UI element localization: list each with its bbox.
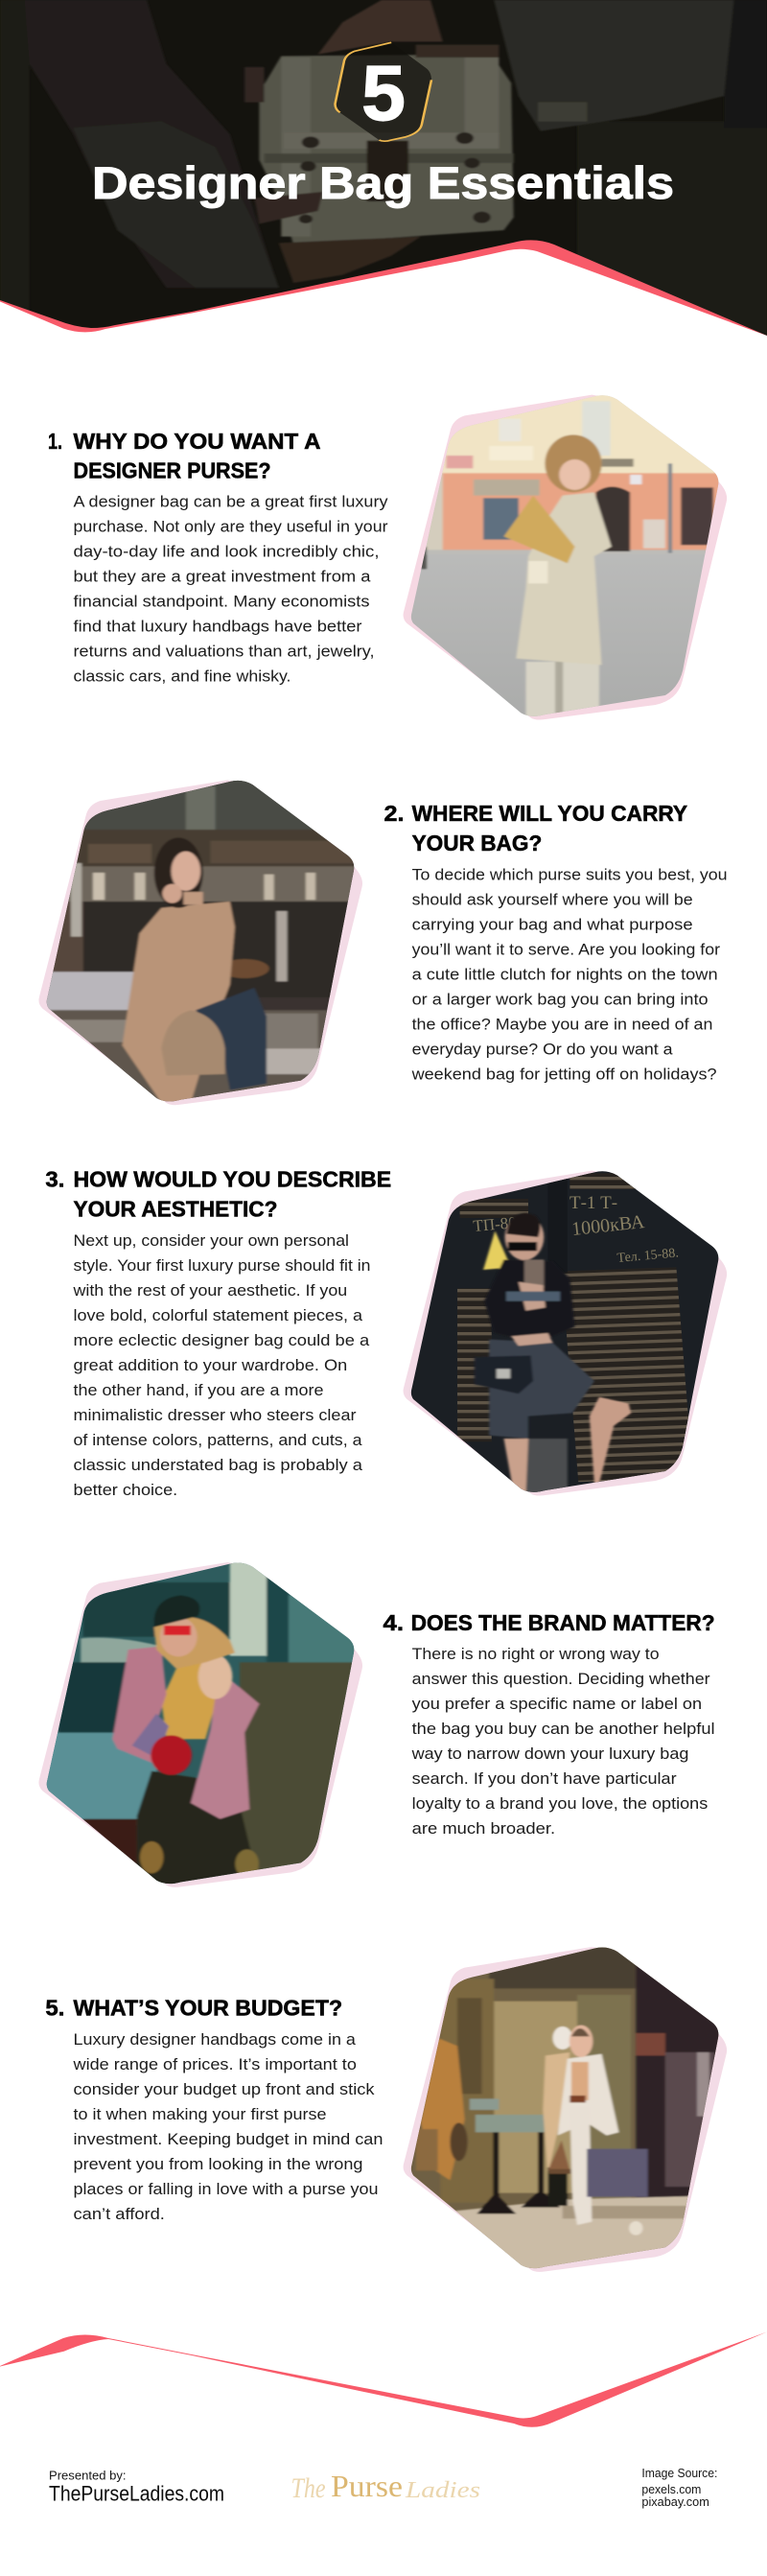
body text 4: are much broader. bbox=[412, 1819, 555, 1838]
heading 1: 1. bbox=[48, 429, 62, 454]
heading 2 bbox=[384, 801, 687, 855]
number 5: 5 bbox=[361, 50, 406, 137]
body text 3: the other hand, if you are a more bbox=[73, 1381, 324, 1399]
heading 5: WHAT’S YOUR BUDGET? bbox=[73, 1995, 342, 2020]
panel: section 5 bbox=[45, 1940, 733, 2280]
body text 2: everyday purse? Or do you want a bbox=[412, 1040, 673, 1059]
body text 1: but they are a great investment from a bbox=[73, 568, 371, 585]
logo: The Purse Ladies bbox=[291, 2469, 480, 2504]
title: Designer Bag Essentials bbox=[92, 157, 674, 208]
logo: The Purse Ladies: The bbox=[291, 2472, 326, 2504]
stencilled wall lettering: 1000кВА bbox=[570, 1211, 646, 1240]
panel: section 2 bbox=[38, 774, 728, 1110]
body text 3: minimalistic dresser who steers clear bbox=[73, 1406, 357, 1424]
heading 1 bbox=[48, 429, 320, 483]
panel: section 4 bbox=[38, 1557, 715, 1892]
coral wave below header bbox=[0, 240, 767, 357]
body text 1 bbox=[73, 493, 388, 685]
body text 2: or a larger work bag you can bring into bbox=[412, 990, 709, 1009]
photo 2: woman in beige coat on a bench bbox=[38, 774, 372, 1110]
body text 4: you prefer a specific name or label on bbox=[412, 1695, 702, 1713]
heading 3: YOUR AESTHETIC? bbox=[73, 1197, 278, 1222]
header photo: hands holding a handbag bbox=[0, 0, 767, 355]
body text 4: loyalty to a brand you love, the options bbox=[412, 1794, 708, 1813]
body text 1: find that luxury handbags have better bbox=[73, 618, 362, 635]
image source: pixabay.com bbox=[641, 2494, 709, 2509]
stencilled wall lettering: Тел. 15-88. bbox=[616, 1246, 679, 1266]
image source bbox=[641, 2466, 717, 2509]
body text 3: classic understated bag is probably a bbox=[73, 1456, 363, 1474]
heading 3: 3. bbox=[45, 1166, 64, 1191]
body text 4: There is no right or wrong way to bbox=[412, 1645, 660, 1663]
body text 2: you’ll want it to serve. Are you looking for bbox=[412, 940, 720, 959]
heading 2: YOUR BAG? bbox=[412, 831, 542, 855]
body text 1: day-to-day life and look incredibly chic, bbox=[73, 543, 380, 560]
body text 5: Luxury designer handbags come in a bbox=[73, 2030, 356, 2049]
photo 4: woman in pink fur with red belt bag bbox=[38, 1557, 372, 1892]
body text 2 bbox=[411, 865, 728, 1084]
body text 5 bbox=[72, 2030, 384, 2223]
body text 5: consider your budget up front and stick bbox=[73, 2080, 375, 2098]
photo 1: woman in trench coat with gold clutch bbox=[401, 390, 733, 726]
body text 3: better choice. bbox=[73, 1481, 177, 1499]
panel: section 1 bbox=[48, 390, 733, 726]
body text 1: financial standpoint. Many economists bbox=[73, 593, 370, 610]
body text 3: Next up, consider your own personal bbox=[73, 1231, 349, 1250]
body text 4: search. If you don’t have particular bbox=[412, 1769, 677, 1788]
heading 1: DESIGNER PURSE? bbox=[73, 458, 270, 483]
body text 3: more eclectic designer bag could be a bbox=[73, 1331, 370, 1349]
body text 2: To decide which purse suits you best, you bbox=[412, 865, 728, 884]
body text 1: A designer bag can be a great first luxury bbox=[73, 493, 388, 510]
heading 5: 5. bbox=[45, 1995, 64, 2020]
body text 5: can’t afford. bbox=[73, 2205, 165, 2223]
body text 4: answer this question. Deciding whether bbox=[412, 1670, 710, 1688]
presented by: Presented by: bbox=[49, 2469, 127, 2482]
body text 3: style. Your first luxury purse should fit in bbox=[73, 1256, 370, 1275]
body text 1: classic cars, and fine whisky. bbox=[73, 667, 291, 685]
photo 3: woman against dark louvered wall bbox=[401, 1163, 733, 1503]
body text 5: investment. Keeping budget in mind can bbox=[73, 2130, 384, 2148]
logo: The Purse Ladies: Ladies bbox=[405, 2478, 480, 2503]
body text 5: places or falling in love with a purse you bbox=[73, 2180, 378, 2198]
stencilled wall lettering: ТП-80 bbox=[473, 1213, 517, 1235]
body text 5: to it when making your first purse bbox=[73, 2105, 326, 2123]
body text 3 bbox=[72, 1231, 371, 1499]
photo 5: woman shopping beside boutique window bbox=[401, 1940, 733, 2280]
panel: section 3 bbox=[45, 1163, 733, 1503]
heading 3 bbox=[45, 1166, 391, 1222]
heading 4: DOES THE BRAND MATTER? bbox=[411, 1610, 715, 1635]
body text 1: purchase. Not only are they useful in your bbox=[73, 518, 388, 535]
body text 3: of intense colors, patterns, and cuts, a bbox=[73, 1431, 362, 1449]
body text 3: love bold, colorful statement pieces, a bbox=[73, 1306, 363, 1324]
body text 2: weekend bag for jetting off on holidays? bbox=[411, 1065, 717, 1084]
logo: The Purse Ladies: Purse bbox=[331, 2469, 403, 2503]
heading 2: 2. bbox=[384, 801, 405, 826]
stencilled wall lettering bbox=[473, 1197, 679, 1262]
heading 3: HOW WOULD YOU DESCRIBE bbox=[73, 1166, 391, 1191]
body text 5: wide range of prices. It’s important to bbox=[72, 2055, 357, 2073]
body text 4: the bag you buy can be another helpful bbox=[412, 1720, 715, 1738]
body text 2: should ask yourself where you will be bbox=[412, 890, 693, 909]
presented by bbox=[49, 2469, 224, 2505]
body text 4 bbox=[411, 1645, 715, 1838]
heading 4: 4. bbox=[384, 1610, 404, 1635]
coral wave divider bbox=[0, 2332, 767, 2427]
heading 1: WHY DO YOU WANT A bbox=[73, 429, 320, 454]
body text 2: the office? Maybe you are in need of an bbox=[412, 1015, 712, 1034]
body text 1: returns and valuations than art, jewelry, bbox=[73, 643, 374, 660]
image source: pexels.com bbox=[641, 2482, 701, 2496]
body text 4: way to narrow down your luxury bag bbox=[411, 1745, 688, 1763]
body text 3: great addition to your wardrobe. On bbox=[73, 1356, 347, 1374]
heading 2: WHERE WILL YOU CARRY bbox=[412, 801, 687, 826]
badge: gold outlined hexagon bbox=[335, 42, 431, 141]
header panel bbox=[0, 0, 767, 355]
body text 5: prevent you from looking in the wrong bbox=[73, 2155, 362, 2173]
body text 3: with the rest of your aesthetic. If you bbox=[72, 1281, 347, 1300]
presented by: ThePurseLadies.com bbox=[49, 2482, 224, 2505]
body text 2: a cute little clutch for nights on the town bbox=[412, 965, 718, 984]
stencilled wall lettering: Т-1 Т- bbox=[569, 1193, 617, 1213]
body text 2: carrying your bag and what purpose bbox=[412, 915, 693, 934]
footer bbox=[49, 2466, 717, 2509]
image source: Image Source: bbox=[641, 2466, 717, 2480]
